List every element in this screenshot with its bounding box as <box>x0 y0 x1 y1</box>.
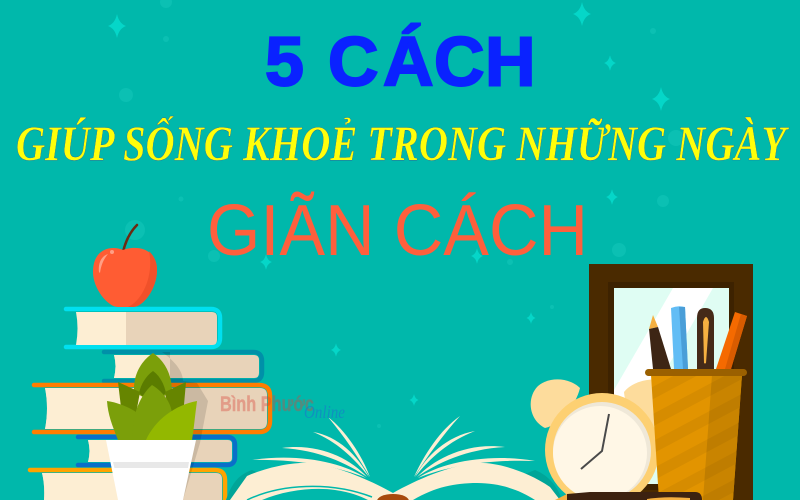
left flying pages <box>252 417 370 478</box>
front left leaf <box>107 401 136 440</box>
front centre leaf <box>133 385 172 440</box>
book 2: teal-blue <box>104 352 262 381</box>
watermark: Bình Phước Online: Online <box>304 402 345 422</box>
spine <box>377 494 409 500</box>
orange marker <box>716 312 747 369</box>
book shadow <box>226 470 270 500</box>
window frame <box>589 264 753 500</box>
back leaf <box>134 353 172 402</box>
icon: open book <box>226 416 562 500</box>
pencil <box>649 315 671 369</box>
watermark: Bình Phước Online: Bình Phước <box>220 393 314 416</box>
background stars and bubbles <box>108 0 684 428</box>
illustration: stack of books <box>30 309 270 500</box>
icon: pen holder <box>645 306 747 500</box>
blue marker <box>671 306 688 369</box>
main pages <box>230 463 560 500</box>
book 1: cyan <box>66 309 220 347</box>
title: 5 CÁCH: 5 CÁCH <box>265 22 536 100</box>
icon: potted plant <box>106 352 208 500</box>
icon: apple <box>93 225 157 307</box>
pot <box>106 440 196 500</box>
cup <box>645 369 747 500</box>
book 3: orange <box>34 385 270 432</box>
plant shadow <box>162 352 208 500</box>
right flying pages <box>414 416 535 478</box>
side leaves <box>118 382 140 416</box>
icon: glasses case at the bottom <box>555 492 702 500</box>
dark pen <box>697 308 714 369</box>
icon: alarm clock <box>531 379 660 500</box>
title: GIÃN CÁCH: GIÃN CÁCH <box>207 191 588 271</box>
front right leaf <box>146 401 197 440</box>
book 5: amber <box>30 470 225 500</box>
book 4: blue <box>78 437 235 465</box>
